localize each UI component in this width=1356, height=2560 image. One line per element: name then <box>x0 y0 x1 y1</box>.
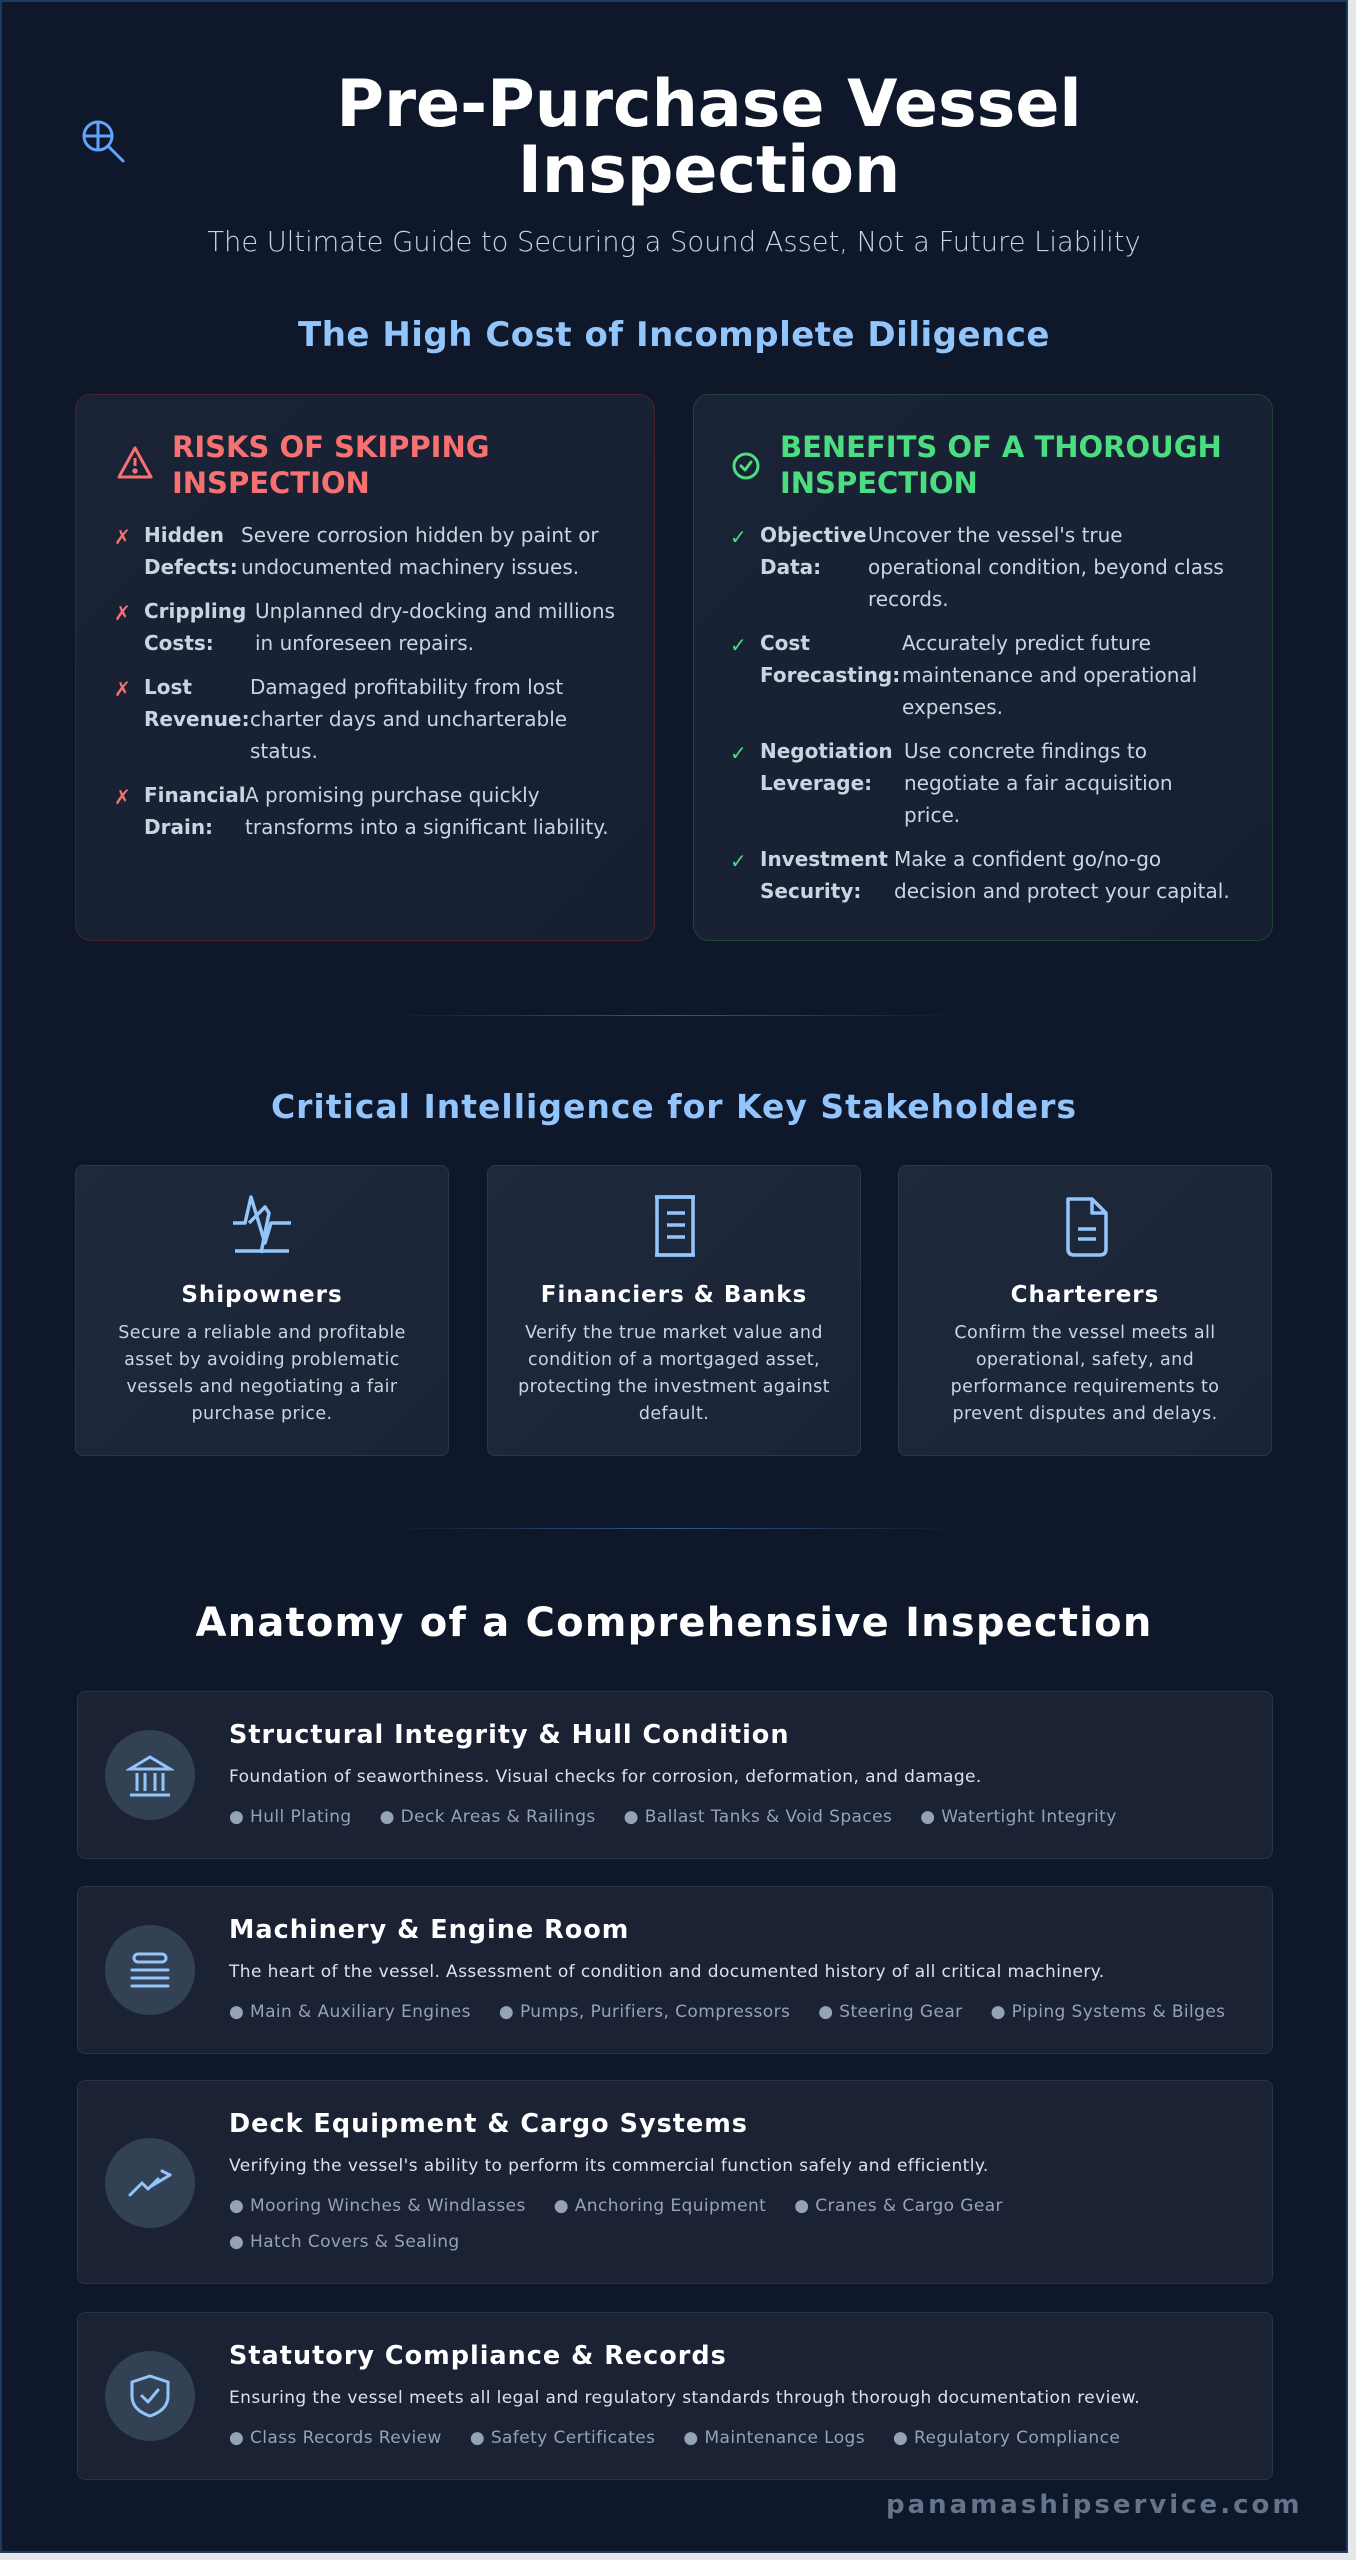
list: risks <box>114 523 615 839</box>
description: Verify the true market value and condition of a mortgaged asset, protecting the investment against default. <box>518 1323 830 1424</box>
panel: financiers <box>487 1165 861 1456</box>
panel: deck equipment: ● Hatch Covers & Sealing <box>229 2232 460 2252</box>
title: Deck Equipment & Cargo Systems <box>229 2109 748 2139</box>
list: risks: Hidden Defects: <box>144 523 238 579</box>
icon: document <box>1066 1197 1108 1257</box>
list: risks: Lost Revenue: <box>144 675 250 731</box>
list: risks: Severe corrosion hidden by paint or undocumented machinery issues. <box>241 523 599 579</box>
list: risks: Damaged profitability from lost charter days and uncharterable status. <box>250 675 567 763</box>
panel: benefits: ✓ <box>730 849 747 873</box>
description: Secure a reliable and profitable asset by avoiding problematic vessels and negotiating a fair purchase price. <box>118 1323 406 1424</box>
icon: ledger <box>655 1195 695 1257</box>
icon: trend <box>105 2138 195 2228</box>
title <box>336 67 1082 208</box>
heading: risks <box>172 430 490 500</box>
name: Charterers <box>1011 1282 1159 1308</box>
icon: shield <box>105 2351 195 2441</box>
list: risks: Financial Drain: <box>144 783 246 839</box>
bullets: ● Class Records Review ● Safety Certificates ● Maintenance Logs ● Regulatory Compliance <box>229 2428 1120 2448</box>
list: benefits: Uncover the vessel's true operational condition, beyond class records. <box>868 523 1224 611</box>
bullets: ● Main & Auxiliary Engines ● Pumps, Purifiers, Compressors ● Steering Gear ● Piping Systems & Bilges <box>229 2002 1225 2022</box>
panel: risks: ✗ <box>114 677 131 701</box>
list: benefits <box>730 523 1230 903</box>
icon: building <box>105 1730 195 1820</box>
heading: benefits <box>780 430 1222 500</box>
panel: risks: ✗ <box>114 785 131 809</box>
icon: warning <box>118 446 153 478</box>
footer: website: panamashipservice.com <box>886 2490 1302 2520</box>
name: Financiers & Banks <box>541 1282 807 1308</box>
heading: stakeholders: Critical Intelligence for Key Stakeholders <box>271 1087 1077 1126</box>
panel: benefits: ✓ <box>730 633 747 657</box>
description: Ensuring the vessel meets all legal and regulatory standards through thorough documentation review. <box>229 2388 1140 2408</box>
panel: charterers <box>898 1165 1272 1456</box>
heading: high cost: The High Cost of Incomplete Diligence <box>298 315 1050 355</box>
subtitle: The Ultimate Guide to Securing a Sound Asset, Not a Future Liability <box>207 227 1141 258</box>
list: risks: A promising purchase quickly transforms into a significant liability. <box>245 783 609 839</box>
bullets: ● Hull Plating ● Deck Areas & Railings ● Ballast Tanks & Void Spaces ● Watertight Integrity <box>229 1807 1117 1827</box>
heading: risks: RISKS OF SKIPPING <box>172 430 490 464</box>
title: Inspection <box>518 133 900 208</box>
panel: shipowners <box>75 1165 449 1456</box>
panel: risks: ✗ <box>114 525 131 549</box>
list: risks: Unplanned dry-docking and millions in unforeseen repairs. <box>255 599 615 655</box>
panel: statutory <box>77 2312 1273 2480</box>
panel: risks: ✗ <box>114 601 131 625</box>
name: Shipowners <box>181 1282 343 1308</box>
heading: anatomy: Anatomy of a Comprehensive Inspection <box>196 1600 1152 1646</box>
title: Machinery & Engine Room <box>229 1915 629 1945</box>
list: benefits: Objective Data: <box>760 523 867 579</box>
title: Structural Integrity & Hull Condition <box>229 1720 790 1750</box>
icon: pulse <box>233 1195 291 1254</box>
description: Verifying the vessel's ability to perform its commercial function safely and efficiently. <box>229 2156 989 2176</box>
panel: benefits: ✓ <box>730 525 747 549</box>
panel: benefits: ✓ <box>730 741 747 765</box>
icon: check circle <box>732 452 760 480</box>
bullets: ● Mooring Winches & Windlasses ● Anchoring Equipment ● Cranes & Cargo Gear <box>229 2196 1003 2216</box>
icon: magnifier <box>82 120 125 163</box>
title: Statutory Compliance & Records <box>229 2341 727 2371</box>
icon: stack <box>105 1925 195 2015</box>
list: benefits: Make a confident go/no-go <box>894 847 1161 871</box>
list: benefits: Cost Forecasting: <box>760 631 900 687</box>
heading: risks: INSPECTION <box>172 466 370 500</box>
heading: benefits: INSPECTION <box>780 466 978 500</box>
panel: deck equipment <box>77 2080 1273 2284</box>
panel: machinery <box>77 1886 1273 2054</box>
list: benefits: Accurately predict future maintenance and operational expenses. <box>902 631 1197 719</box>
description: Foundation of seaworthiness. Visual checks for corrosion, deformation, and damage. <box>229 1767 982 1787</box>
panel: risks <box>75 394 655 941</box>
list: benefits: Investment Security: <box>760 847 888 903</box>
description: Confirm the vessel meets all operational, safety, and performance requirements to prevent disputes and delays. <box>951 1323 1219 1424</box>
list: risks: Crippling Costs: <box>144 599 246 655</box>
description: The heart of the vessel. Assessment of condition and documented history of all critical machinery. <box>229 1962 1105 1982</box>
title: Pre-Purchase Vessel <box>336 67 1082 142</box>
panel: structural <box>77 1691 1273 1859</box>
list: benefits: decision and protect your capital. <box>894 879 1230 903</box>
heading: benefits: BENEFITS OF A THOROUGH <box>780 430 1222 464</box>
list: benefits: Negotiation Leverage: <box>760 739 893 795</box>
list: benefits: Use concrete findings to negotiate a fair acquisition price. <box>904 739 1173 827</box>
panel: benefits <box>693 394 1273 941</box>
